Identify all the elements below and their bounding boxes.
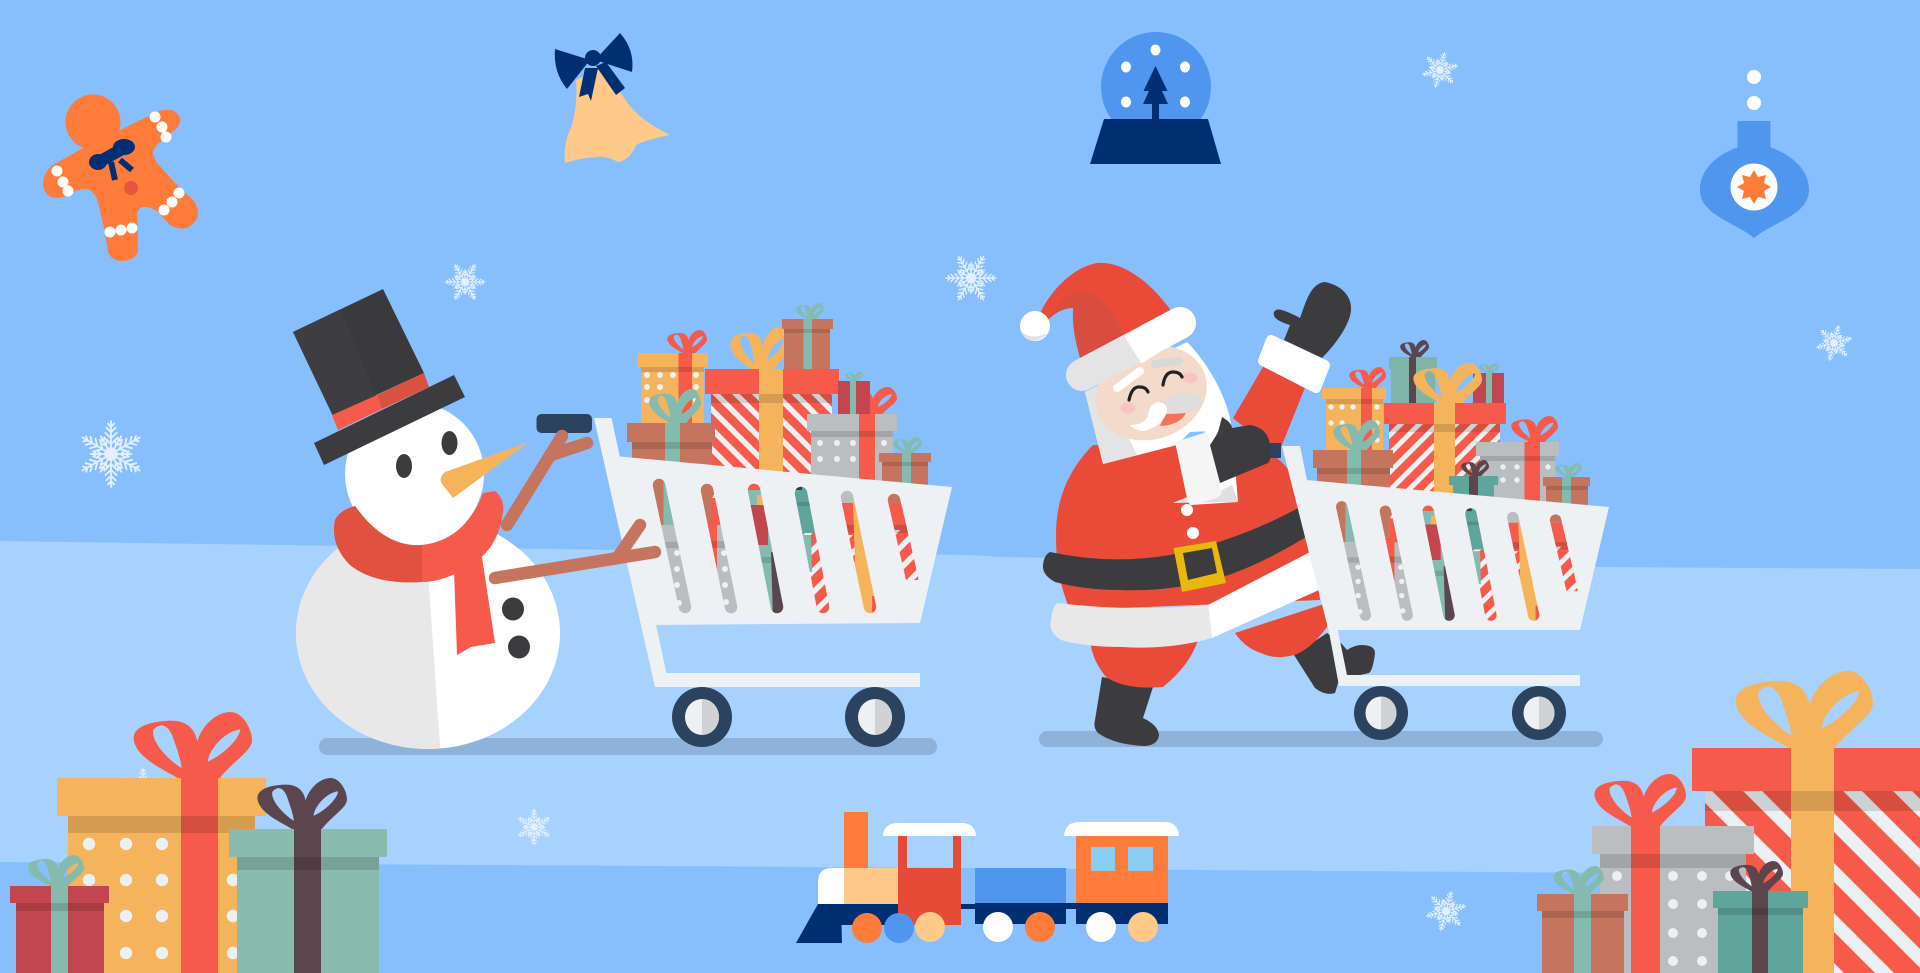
gift: yellow dotted (1322, 367, 1386, 454)
train engine (796, 812, 976, 943)
gift: brown small (1537, 866, 1628, 973)
santa ground shadow (1039, 731, 1603, 747)
santa belt (1043, 507, 1306, 590)
snowman buttons (502, 598, 530, 658)
santa cart handle (1267, 443, 1281, 458)
scarf collar (334, 491, 503, 582)
santa (1020, 263, 1351, 648)
icon: gingerbread man (43, 94, 198, 261)
left cart wheel (672, 687, 732, 747)
right cart wheel (1512, 686, 1566, 740)
santa face (1082, 330, 1220, 456)
right shopping cart (1282, 446, 1609, 686)
panel: left cart gift pile (627, 303, 931, 488)
left shopping cart (536, 414, 952, 687)
gift: brown front (1313, 420, 1393, 494)
train blue wagon (975, 868, 1066, 942)
gift: large striped (1384, 363, 1506, 494)
snowman ground shadow (319, 738, 937, 755)
gift: grey dotted (807, 414, 897, 484)
gift: small teal (1449, 460, 1498, 499)
gift: yellow dotted (637, 330, 708, 427)
snowman (293, 289, 662, 749)
santa raised cuff (1263, 340, 1325, 388)
gift: small brown right (1543, 463, 1590, 510)
snowman body (296, 522, 560, 749)
gift: brown top (782, 303, 833, 369)
santa back leg (1235, 603, 1375, 694)
snowman carrot nose (441, 442, 529, 498)
coat fur trim (1050, 550, 1319, 648)
panel: bottom-right gifts (1537, 671, 1920, 973)
snowman eyes (396, 431, 458, 478)
gift: large striped (705, 327, 839, 480)
panel: right cart gift pile (1313, 340, 1590, 510)
gift: big striped (1692, 671, 1920, 973)
icon: snow globe (1090, 32, 1221, 164)
santa hat (1020, 263, 1180, 375)
gift: grey dotted (1592, 774, 1754, 973)
toy train (796, 812, 1179, 943)
belt buckle (1174, 541, 1226, 592)
santa hand mitten on handle (1210, 417, 1271, 483)
santa front leg (1090, 640, 1198, 746)
gift: teal small (1713, 861, 1808, 973)
snowman head (345, 403, 484, 545)
train orange carriage (1064, 822, 1179, 942)
left cart wheel (845, 687, 905, 747)
top hat (293, 289, 465, 465)
snowman back arm (507, 436, 587, 525)
snowman front arm (495, 525, 655, 578)
gift: crimson small (10, 855, 109, 973)
gift: small brown right (879, 437, 931, 488)
scarf tail (454, 557, 495, 655)
santa raised arm (1233, 345, 1312, 455)
gift: teal (229, 778, 387, 973)
right cart wheel (1354, 686, 1408, 740)
santa coat (1056, 445, 1320, 610)
gift: yellow dotted large (57, 712, 266, 973)
icon: bell with bow (555, 33, 670, 163)
gift: small crimson (838, 372, 870, 415)
icon: tree ornament (1700, 70, 1809, 238)
gift: small crimson (1473, 363, 1504, 404)
gift: teal back (1389, 340, 1437, 404)
train couplers (961, 903, 1077, 909)
snowy ground band (0, 541, 1920, 875)
santa raised mitten (1274, 282, 1351, 358)
coat buttons (1181, 504, 1199, 539)
panel: bottom-left gifts (10, 712, 387, 973)
gift: grey dotted (1476, 416, 1559, 506)
santa beard (1085, 342, 1238, 505)
gift: brown front (627, 389, 715, 470)
